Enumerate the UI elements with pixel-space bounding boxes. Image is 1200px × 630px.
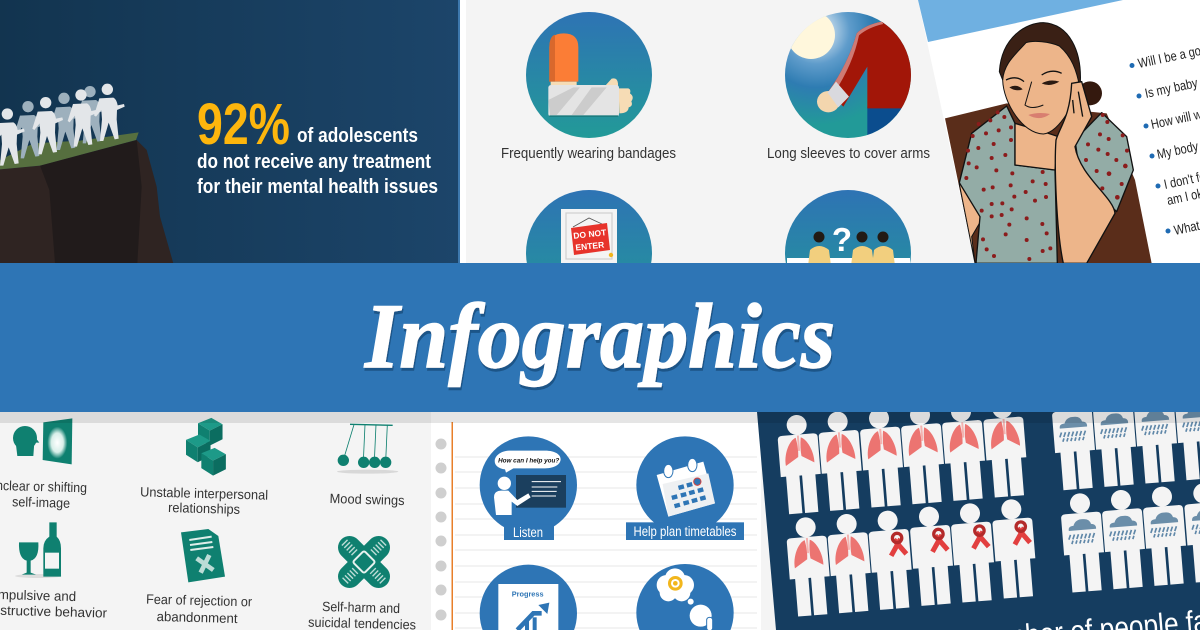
icon: progress chart — [480, 565, 577, 630]
icon: newton cradle — [337, 424, 398, 474]
icon: listen: How can I help you? — [498, 457, 559, 464]
statistic text: do not receive any treatment — [197, 151, 431, 173]
statistic text: for their mental health issues — [197, 176, 438, 198]
heading: Infographics — [364, 285, 835, 387]
label: relationships: relationships — [168, 500, 241, 517]
icon: crossed bandages — [338, 536, 390, 588]
label: self harm — [308, 602, 416, 630]
icon: long sleeves — [785, 11, 914, 140]
label: timetables: Help plan timetables — [634, 524, 737, 539]
label: self image: self-image — [12, 494, 70, 511]
label: mood swings: Mood swings — [329, 491, 405, 508]
people walking on cliff — [0, 84, 125, 166]
icon: listen — [480, 436, 577, 540]
statistic text — [197, 103, 438, 193]
icon: head and portrait — [13, 418, 72, 464]
top shadow strip on lower panels — [0, 412, 1200, 423]
icon: people excluded at table: ? — [832, 221, 852, 258]
icon: thinking of reward — [636, 564, 734, 630]
panel: notebook support tips — [431, 412, 761, 630]
label: rejection: Fear of rejection or — [146, 592, 253, 609]
panel: rotated pregnancy worry page — [918, 0, 1200, 263]
icon: progress chart: Progress — [512, 590, 544, 599]
label: rejection — [147, 594, 252, 624]
icon: calendar — [626, 436, 744, 540]
questions list — [1130, 31, 1200, 238]
label: relationships — [141, 487, 268, 516]
cliff illustration — [0, 132, 173, 263]
label: self image — [0, 480, 86, 510]
label: impulsive behaviour — [0, 590, 107, 618]
icon: rejected document — [181, 529, 225, 582]
label: relationships: Unstable interpersonal — [140, 484, 268, 503]
label: rejection: abandonment — [156, 609, 238, 626]
panel: warning signs — [502, 12, 930, 263]
panel: adolescents statistic — [0, 0, 466, 263]
label: listen: Listen — [513, 525, 543, 540]
panel: people with conditions — [757, 412, 1200, 630]
icon: people excluded at table — [785, 190, 911, 263]
dress dots — [964, 110, 1129, 261]
rows of people with rain clouds — [1052, 412, 1200, 592]
icon: do not enter door: ENTER — [575, 240, 605, 252]
icon: do not enter door — [526, 190, 652, 263]
title band — [0, 263, 1200, 412]
icon: bandaged arm — [526, 12, 652, 138]
statistic text: of adolescents — [297, 125, 418, 147]
bullet question 5 — [1156, 161, 1200, 208]
illustration: worried pregnant woman — [945, 23, 1152, 263]
label: long sleeves: Long sleeves to cover arms — [767, 146, 930, 162]
row of people with lungs — [778, 412, 1026, 514]
label: self harm: Self-harm and — [322, 599, 400, 616]
panel: borderline personality symptoms — [0, 412, 431, 630]
statistic text: 92% — [197, 92, 290, 157]
icon: stacked cubes — [186, 418, 226, 476]
icon: do not enter door: DO NOT — [573, 227, 608, 241]
icon: wine and bottle — [15, 522, 62, 578]
row of people with lungs and ribbons — [785, 498, 1038, 617]
label: bandages: Frequently wearing bandages — [501, 146, 676, 162]
